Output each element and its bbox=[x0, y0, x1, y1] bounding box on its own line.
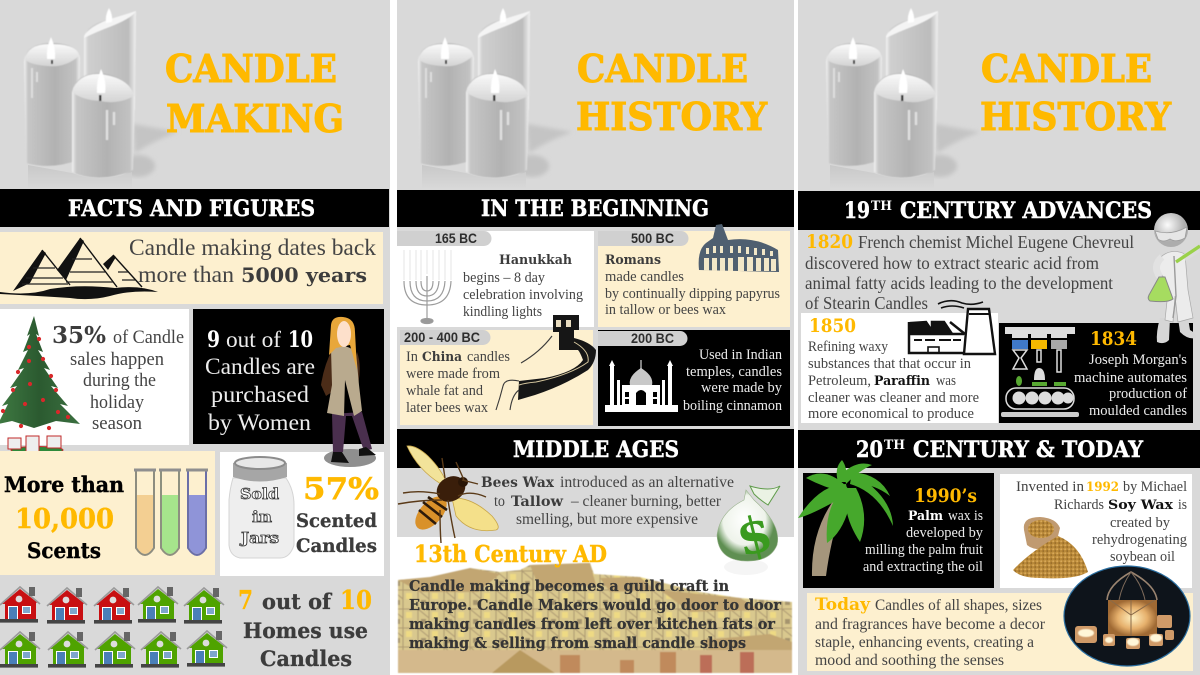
label: 500 BC: 500 BC bbox=[631, 230, 674, 246]
text: holiday sales: season bbox=[92, 413, 142, 434]
panel: 200-400 BC China bbox=[400, 329, 593, 425]
text: China candles: China bbox=[422, 350, 463, 365]
icon: candles, early history panel bbox=[418, 8, 572, 189]
icon: chemist figure bbox=[1148, 213, 1200, 343]
heading: facts and figures: FACTS AND FIGURES bbox=[68, 196, 315, 222]
text: holiday sales: holiday bbox=[90, 392, 144, 413]
text: soy wax: created by bbox=[1110, 515, 1171, 531]
text: Romans: by continually dipping papyrus bbox=[605, 286, 780, 302]
text: bees wax: Tallow bbox=[511, 494, 564, 510]
panel: 1850 paraffin bbox=[801, 301, 998, 423]
text: 1990s palm: wax is bbox=[948, 508, 983, 524]
heading: facts and figures bbox=[0, 189, 389, 227]
text: Indian temples bbox=[683, 347, 783, 414]
heading: in the beginning: IN THE BEGINNING bbox=[481, 196, 709, 222]
text: 1820 Chevreul: animal fatty acids leading to the development bbox=[805, 273, 1113, 293]
panel: candle history early bbox=[397, 0, 794, 537]
label: 200 - 400 BC: 200 - 400 BC bbox=[404, 329, 480, 345]
text: 57% scented candles: Scented bbox=[296, 510, 377, 532]
text: 1850 paraffin bbox=[808, 315, 979, 422]
icon: candles, facts panel bbox=[24, 8, 178, 189]
text: China candles: later bees wax bbox=[406, 400, 489, 416]
label: 165 BC bbox=[397, 230, 492, 246]
text: 7 out of 10 homes: Homes use bbox=[243, 618, 368, 643]
text: 5000 years: Candle making dates back bbox=[129, 235, 377, 260]
text: 57% scented candles bbox=[296, 472, 379, 557]
text: 1820 Chevreul: of Stearin Candles bbox=[805, 293, 928, 313]
label: 165 BC: 165 BC bbox=[435, 230, 477, 246]
text: soy wax: Richards bbox=[1054, 497, 1104, 513]
text: 1850 paraffin: was bbox=[936, 373, 956, 389]
text: 10,000 scents: More than bbox=[4, 472, 124, 497]
title: candle history: CANDLE bbox=[577, 46, 748, 91]
text: 1820 Chevreul: 1820 bbox=[806, 231, 853, 253]
text: 1850 paraffin: 1850 bbox=[809, 315, 856, 337]
icon: money bag: $ bbox=[730, 503, 778, 568]
heading: middle ages: MIDDLE AGES bbox=[513, 437, 679, 463]
panel: scented candles and jars bbox=[220, 317, 384, 576]
icon: bee bbox=[398, 446, 498, 543]
icon: menorah bbox=[404, 250, 451, 324]
text: 5000 years: more than bbox=[138, 262, 235, 287]
text: Hanukkah: kindling lights bbox=[463, 304, 542, 320]
text: guild craft: making candles from left over kitchen fats or bbox=[409, 616, 775, 633]
text: 1850 paraffin: more economical to produce bbox=[808, 406, 974, 422]
text: soy wax bbox=[1016, 479, 1187, 565]
text: China candles: whale fat and bbox=[406, 383, 484, 399]
text: 1850 paraffin: cleaner was cleaner and more bbox=[808, 390, 979, 406]
icon: palm tree bbox=[798, 460, 893, 576]
text: 1820 Chevreul bbox=[805, 231, 1134, 313]
text: 1990s palm: 1990’s bbox=[914, 485, 977, 507]
text: Hanukkah bbox=[463, 253, 583, 320]
heading: 20th century and today: TH bbox=[884, 438, 905, 453]
text: 1834 machine: production of bbox=[1109, 386, 1187, 402]
text: 13th century: 13th Century AD bbox=[414, 541, 607, 568]
text: guild craft: Europe. Candle Makers would go door to door bbox=[409, 597, 781, 614]
heading: 19th century advances: 19 bbox=[844, 198, 870, 224]
icon: jar sold in jars: Sold bbox=[240, 485, 280, 503]
text: China candles bbox=[406, 349, 510, 416]
text: 1834 machine: moulded candles bbox=[1089, 403, 1187, 419]
text: 7 out of 10 homes: out of bbox=[262, 589, 333, 614]
panel: today bbox=[807, 566, 1193, 671]
text: soy wax: is bbox=[1178, 497, 1187, 513]
text: 1834 machine: Joseph Morgan's bbox=[1089, 352, 1187, 368]
text: Indian temples: were made by bbox=[701, 380, 783, 396]
text: guild craft bbox=[409, 578, 781, 652]
label: 200 BC bbox=[598, 330, 688, 346]
icon: jar sold in jars: Jars bbox=[239, 529, 279, 547]
title: candle history modern: HISTORY bbox=[980, 94, 1172, 139]
text: 1834 machine bbox=[1074, 328, 1187, 419]
text: bees wax: smelling, but more expensive bbox=[516, 511, 698, 528]
text: holiday sales: sales happen bbox=[70, 349, 164, 370]
panel: candle making facts bbox=[0, 0, 390, 675]
text: 1990s palm: Palm bbox=[908, 509, 943, 524]
title: candle making: MAKING bbox=[166, 96, 344, 141]
title: candle making: CANDLE bbox=[165, 46, 337, 91]
title: candle history bbox=[576, 46, 768, 139]
title: candle making bbox=[165, 46, 344, 141]
text: 1834 machine: 1834 bbox=[1090, 328, 1137, 350]
text: soy wax: rehydrogenating bbox=[1092, 532, 1187, 548]
text: bees wax: introduced as an alternative bbox=[560, 474, 734, 491]
panel: holiday sales bbox=[0, 309, 189, 454]
text: 5000 years: 5000 years bbox=[241, 263, 367, 287]
text: 1850 paraffin: Paraffin bbox=[874, 374, 931, 389]
text: 1990s palm: and extracting the oil bbox=[863, 559, 983, 575]
icon: soybean sack bbox=[1013, 517, 1088, 578]
text: Romans: in tallow or bees wax bbox=[605, 302, 727, 318]
icon: candles, modern history panel bbox=[826, 8, 980, 189]
icon: money bag bbox=[717, 486, 780, 575]
text: holiday sales bbox=[52, 322, 184, 434]
text: 9 out of 10: out of bbox=[226, 327, 281, 352]
title: candle history modern bbox=[980, 46, 1172, 139]
heading: 19th century advances bbox=[798, 191, 1200, 230]
label: 200 BC: 200 BC bbox=[631, 330, 674, 346]
icon: woman bbox=[321, 317, 376, 467]
text: guild craft: making & selling from small candle shops bbox=[409, 635, 746, 652]
heading: 20th century and today: CENTURY & TODAY bbox=[913, 437, 1143, 463]
panel: candle history modern bbox=[798, 0, 1200, 675]
text: 1834 machine: machine automates bbox=[1074, 370, 1187, 386]
text: 7 out of 10 homes bbox=[238, 586, 372, 671]
panel: 165 BC bbox=[397, 230, 594, 327]
heading: in the beginning bbox=[397, 190, 794, 227]
icon: test tubes bbox=[134, 470, 208, 555]
panel: purchased by women bbox=[193, 309, 384, 444]
heading: 20th century and today: 20 bbox=[856, 437, 883, 463]
text: 7 out of 10 homes: 10 bbox=[340, 586, 372, 616]
text: Indian temples: temples, candles bbox=[686, 364, 782, 380]
text: soy wax: 1992 bbox=[1086, 480, 1119, 495]
text: today candles: Today bbox=[815, 595, 871, 615]
panel: 500 BC Romans bbox=[598, 224, 790, 327]
text: Indian temples: boiling cinnamon bbox=[683, 398, 783, 414]
text: soy wax: by Michael bbox=[1123, 479, 1187, 495]
panel: 1834 machine bbox=[999, 323, 1193, 423]
text: 10,000 scents: 10,000 bbox=[15, 504, 114, 535]
heading: 19th century advances: TH bbox=[871, 199, 892, 214]
icon: christmas tree bbox=[0, 316, 80, 454]
text: 9 out of 10: by Women bbox=[208, 410, 312, 435]
panel: 1990s palm wax bbox=[798, 460, 994, 588]
text: bees wax bbox=[481, 474, 734, 528]
text: soy wax: soybean oil bbox=[1110, 549, 1175, 565]
icon: candle machine bbox=[1001, 327, 1079, 417]
text: today candles: mood and soothing the senses bbox=[815, 652, 1004, 669]
text: 1820 Chevreul: discovered how to extract stearic acid from bbox=[805, 253, 1099, 273]
text: 1850 paraffin: Refining waxy bbox=[808, 339, 889, 355]
text: 7 out of 10 homes: 7 bbox=[238, 586, 253, 616]
chart: houses pictogram bbox=[0, 587, 227, 668]
text: today candles: Candles of all shapes, sizes bbox=[875, 597, 1042, 614]
text: soy wax: Invented in bbox=[1016, 479, 1085, 495]
text: 1990s palm: developed by bbox=[906, 525, 984, 541]
text: 10,000 scents bbox=[4, 472, 124, 563]
text: China candles: were made from bbox=[406, 366, 501, 382]
text: holiday sales: of Candle bbox=[113, 327, 184, 348]
text: Romans: Romans bbox=[605, 253, 661, 268]
text: Romans: made candles bbox=[605, 269, 684, 285]
label: 500 BC bbox=[598, 230, 688, 246]
text: 9 out of 10: purchased bbox=[211, 382, 310, 407]
text: today candles: and fragrances have become a decor bbox=[815, 616, 1046, 633]
panel: 5000 years fact bbox=[0, 232, 383, 304]
panel: 200 BC India bbox=[598, 330, 790, 426]
text: 7 out of 10 homes: Candles bbox=[260, 646, 352, 671]
text: today candles bbox=[815, 595, 1046, 669]
heading: 19th century advances: CENTURY ADVANCES bbox=[900, 198, 1152, 224]
text: holiday sales: during the bbox=[83, 370, 156, 391]
text: 9 out of 10: Candles are bbox=[205, 354, 315, 379]
image: medieval town bbox=[398, 563, 792, 673]
text: 57% scented candles: 57% bbox=[303, 472, 379, 507]
text: 1850 paraffin: substances that that occur in bbox=[808, 356, 972, 372]
text: today candles: staple, enhancing events, creating a bbox=[815, 634, 1034, 651]
text: Indian temples: Used in Indian bbox=[699, 347, 783, 363]
icon: jar sold in jars: in bbox=[252, 508, 272, 526]
text: 1850 paraffin: Petroleum, bbox=[808, 373, 871, 389]
icon: taj mahal bbox=[605, 360, 678, 412]
text: 10,000 scents: Scents bbox=[27, 538, 101, 563]
heading: 20th century and today bbox=[798, 430, 1200, 468]
icon: factory bbox=[909, 301, 995, 354]
text: bees wax: Bees Wax bbox=[481, 475, 555, 491]
text: guild craft: Candle making becomes a guild craft in bbox=[409, 578, 729, 595]
text: China candles: In bbox=[406, 349, 419, 365]
text: holiday sales: 35% bbox=[52, 322, 106, 349]
heading: middle ages bbox=[397, 429, 794, 468]
text: 5000 years bbox=[129, 235, 377, 287]
text: 9 out of 10 bbox=[205, 327, 315, 435]
title: candle history modern: CANDLE bbox=[981, 46, 1152, 91]
icon: great wall bbox=[496, 315, 596, 410]
text: soy wax: Soy Wax bbox=[1108, 498, 1173, 513]
title: candle history: HISTORY bbox=[576, 94, 768, 139]
text: bees wax: to bbox=[494, 493, 505, 510]
text: Hanukkah: Hanukkah bbox=[499, 253, 573, 268]
text: 1990s palm: milling the palm fruit bbox=[865, 542, 983, 558]
text: China candles: candles bbox=[467, 349, 510, 365]
image: candle lantern circle bbox=[1064, 566, 1190, 666]
panel: scents bbox=[0, 451, 215, 575]
text: Romans bbox=[605, 253, 780, 318]
icon: jar sold in jars bbox=[229, 457, 294, 558]
text: 9 out of 10: 10 bbox=[288, 327, 313, 353]
text: 1990s palm bbox=[863, 485, 984, 575]
icon: colosseum bbox=[699, 224, 779, 272]
text: bees wax: – cleaner burning, better bbox=[570, 493, 722, 510]
text: 9 out of 10: 9 bbox=[207, 327, 220, 353]
text: 57% scented candles: Candles bbox=[296, 535, 377, 557]
panel: town image and guild text bbox=[398, 541, 792, 673]
text: Hanukkah: begins – 8 day bbox=[463, 270, 546, 286]
text: Hanukkah: celebration involving bbox=[463, 287, 583, 303]
panel: 1992 soy wax bbox=[1000, 474, 1192, 588]
text: 1820 Chevreul: French chemist Michel Eugene Chevreul bbox=[858, 232, 1134, 252]
icon: pyramids bbox=[0, 238, 158, 299]
